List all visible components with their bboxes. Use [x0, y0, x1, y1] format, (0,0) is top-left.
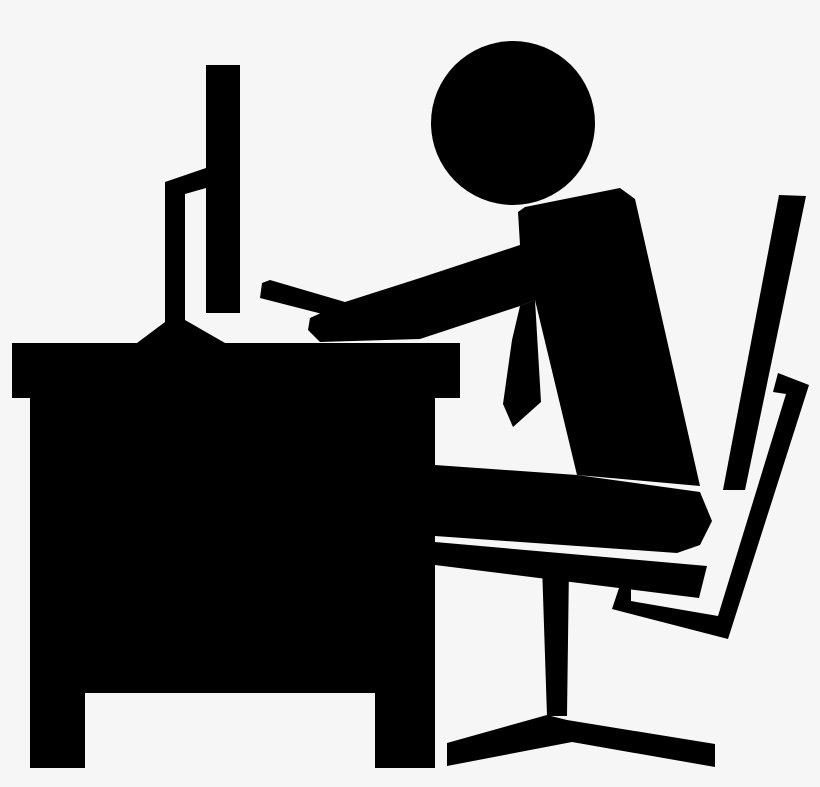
desk [12, 343, 460, 768]
icon: tie [503, 300, 541, 427]
chair [435, 195, 809, 767]
icon: head [431, 41, 595, 205]
person body [260, 188, 712, 553]
icon: monitor [137, 65, 240, 343]
